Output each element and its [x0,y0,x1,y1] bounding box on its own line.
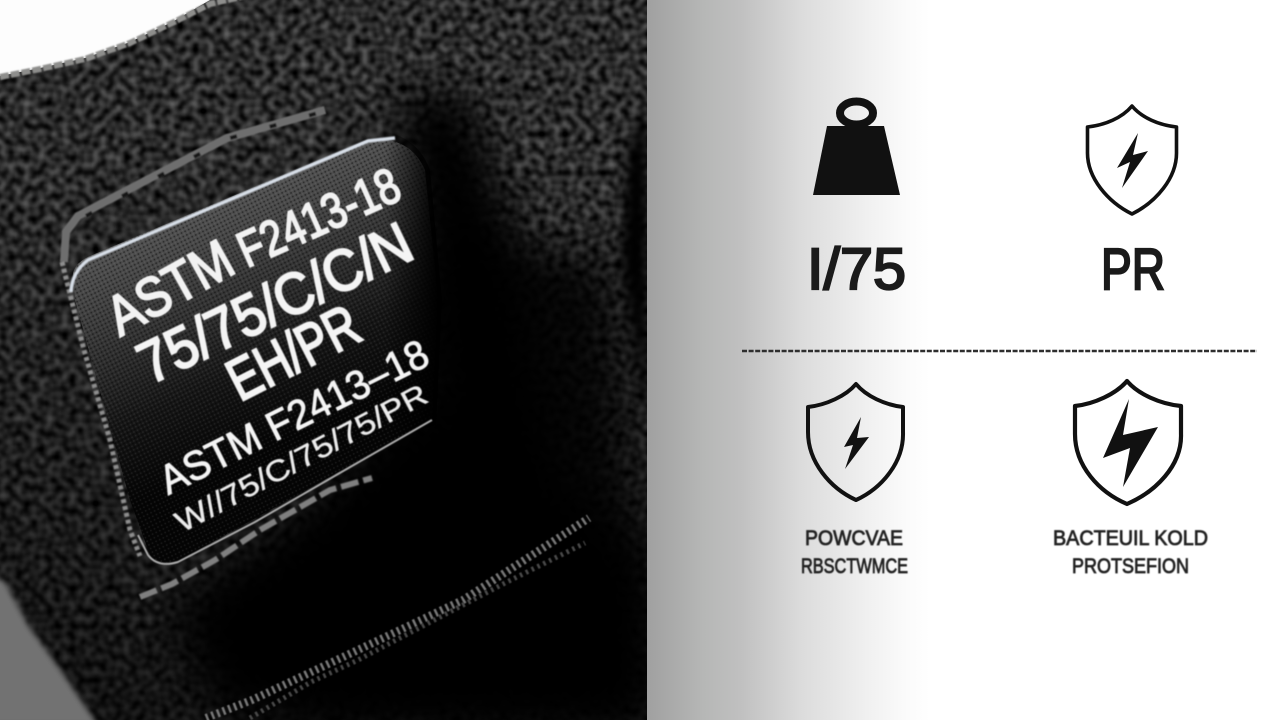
caption: right shield: BACTEUIL KOLD [1053,527,1208,550]
icon: shield with small bolt (top) [1087,106,1177,214]
collar edge stitching [0,0,245,77]
divider: dashed line [742,350,1257,352]
caption: right shield: PROTSEFION [1072,555,1189,578]
label text: EH/PR: EH/PR [216,292,371,414]
heading: PR: PR [1101,237,1165,302]
heading: I/75: I/75 [807,237,906,302]
caption: left shield: POWCVAE [805,527,903,550]
second row of zigzag stitching [250,543,585,718]
label text: standard line [112,168,402,339]
stitched label border [62,110,372,597]
woven label [71,130,442,564]
panel: icon gradient background [647,0,1280,720]
caption: left shield: RBSCTWMCE [801,555,908,578]
label text: standard line: ASTM [95,227,244,347]
label text: second standard line: ASTM F2413–18 [151,330,436,503]
label lower edge stitch [138,420,432,564]
label text: rating line: 75/75/C/C/N [128,210,423,397]
panel: boot label photo [0,0,647,720]
foreground blur at bottom left [0,578,98,720]
fabric: boot lining texture [0,0,647,720]
caption: right shield [1053,527,1208,578]
icon: shield with large bolt (bottom right) [1075,381,1181,504]
background: white area above the collar [0,0,210,76]
label white top edge [71,138,395,292]
label text: small code line: W//75/C/75/75/PR [170,378,433,539]
label text: standard line: F2413-18 [229,157,409,278]
icon: shield with small bolt (bottom left) [808,384,903,500]
icon: weight [813,102,900,195]
zigzag stitching under the label [206,518,589,718]
caption: left shield [801,527,908,578]
